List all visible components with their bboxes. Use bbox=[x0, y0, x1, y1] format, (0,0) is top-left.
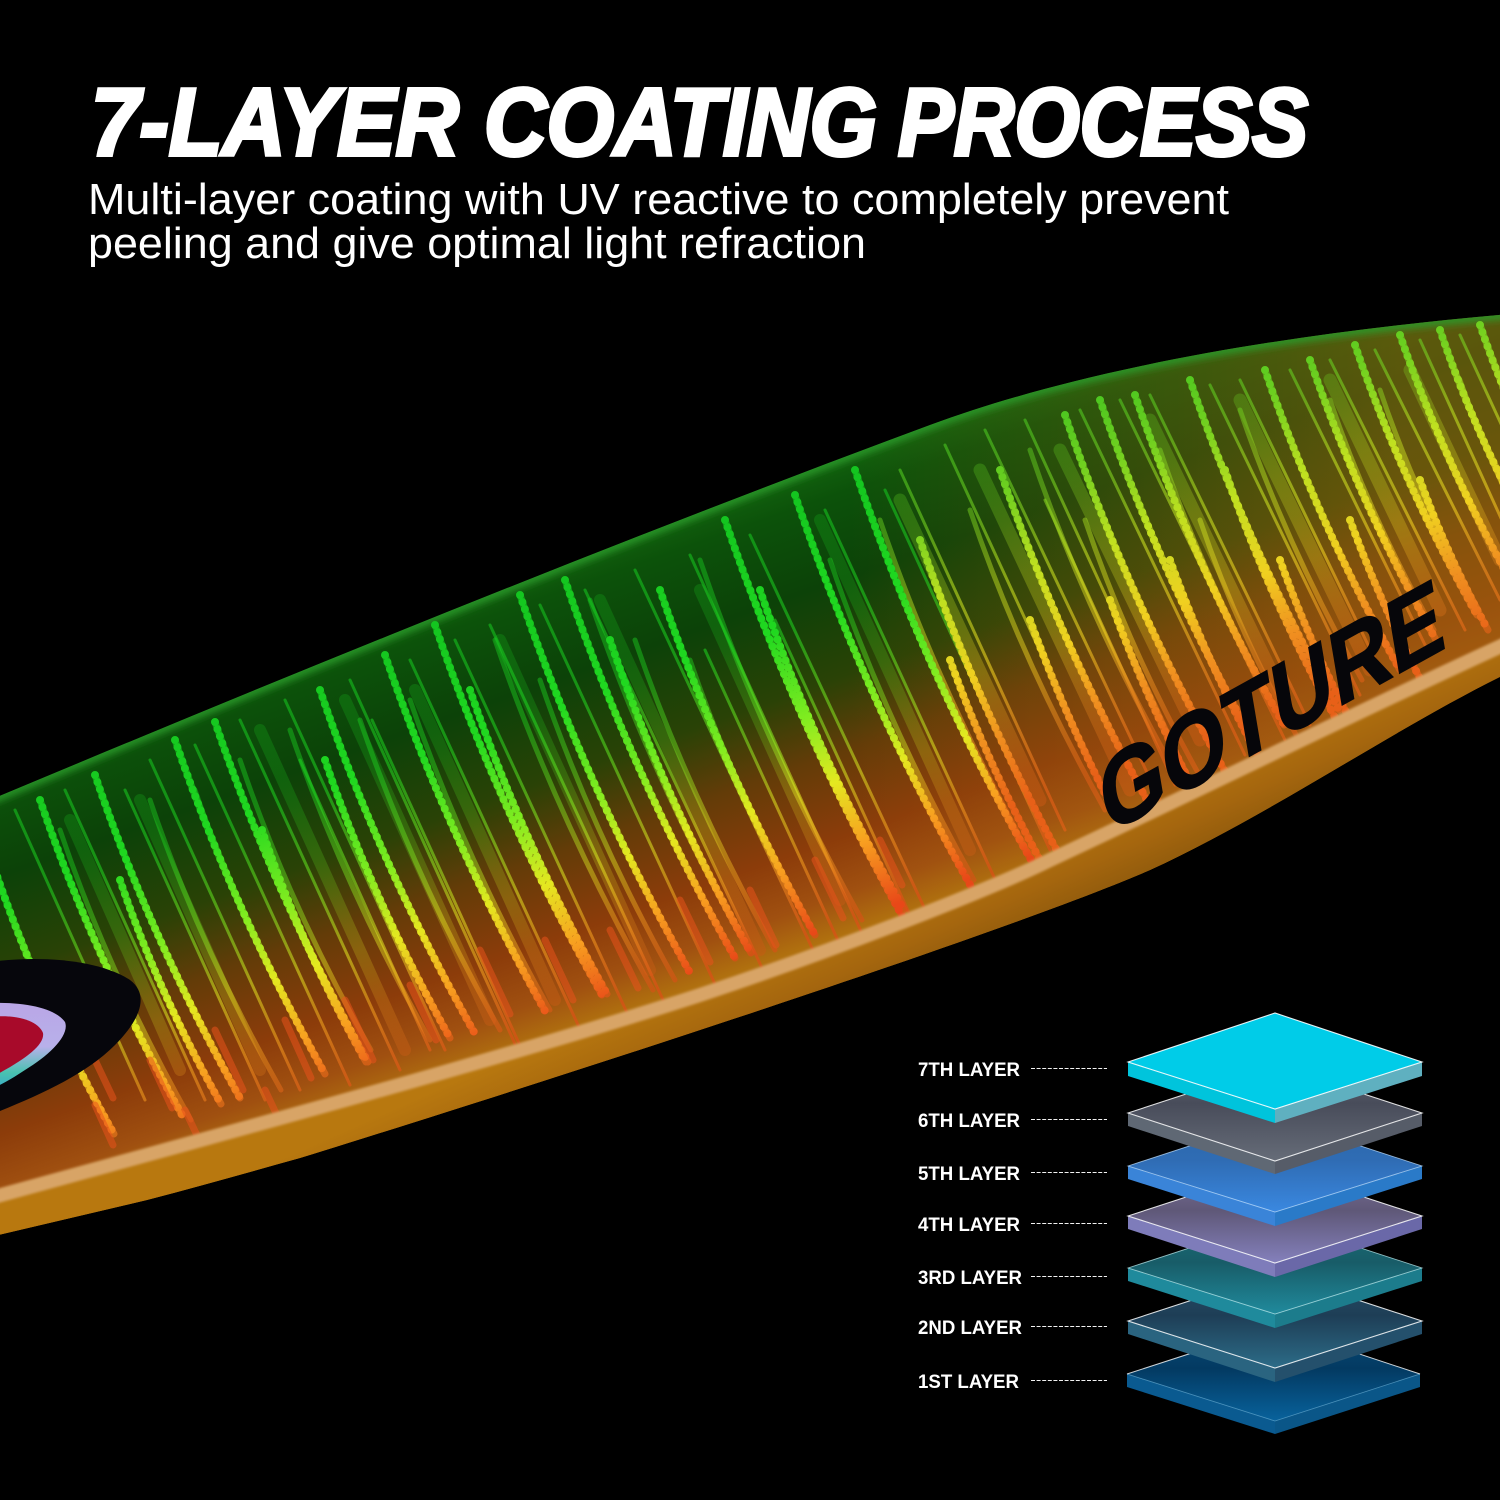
layer 2 bbox=[1128, 1273, 1422, 1382]
title: COATING bbox=[484, 69, 877, 176]
title: PROCESS bbox=[898, 69, 1308, 176]
holographic streaks bbox=[0, 325, 1500, 1148]
fishing lure body bbox=[0, 300, 1500, 1260]
layer labels: 2ND LAYER bbox=[918, 1318, 1022, 1339]
layer labels: 4TH LAYER bbox=[918, 1215, 1020, 1236]
layer 1 bbox=[1127, 1326, 1420, 1434]
dashed leader lines bbox=[1031, 1068, 1107, 1380]
orange-red lower streaks bbox=[95, 840, 902, 1148]
layer 4 bbox=[1128, 1168, 1422, 1277]
subtitle text: Multi-layer coating with UV reactive to completely prevent bbox=[88, 175, 1229, 224]
title bbox=[91, 69, 1308, 176]
dim wide streaks bbox=[70, 520, 970, 1070]
beaded streaks bbox=[0, 470, 1031, 1134]
icon: lure eye bbox=[0, 959, 141, 1115]
subtitle text: peeling and give optimal light refraction bbox=[88, 219, 866, 268]
layer labels: 6TH LAYER bbox=[918, 1111, 1020, 1132]
layer labels: 7TH LAYER bbox=[918, 1060, 1020, 1081]
layer stack diagram bbox=[1127, 1013, 1422, 1434]
layer 3 bbox=[1128, 1220, 1422, 1328]
subtitle text bbox=[88, 175, 1229, 268]
layer 7 bbox=[1128, 1013, 1422, 1123]
bright streak cores bbox=[60, 560, 974, 1120]
layer labels bbox=[918, 1060, 1022, 1393]
amber belly bbox=[0, 642, 1500, 1260]
layer labels: 1ST LAYER bbox=[918, 1372, 1019, 1393]
layer 5 bbox=[1128, 1118, 1422, 1226]
peach band bbox=[0, 642, 1500, 1198]
green top edge glow bbox=[0, 314, 1500, 800]
layer labels: 5TH LAYER bbox=[918, 1164, 1020, 1185]
brand logo on lure: GOTURE bbox=[1092, 556, 1451, 857]
layer labels: 3RD LAYER bbox=[918, 1268, 1022, 1289]
title: 7-LAYER bbox=[91, 69, 459, 176]
layer 6 bbox=[1128, 1065, 1422, 1174]
